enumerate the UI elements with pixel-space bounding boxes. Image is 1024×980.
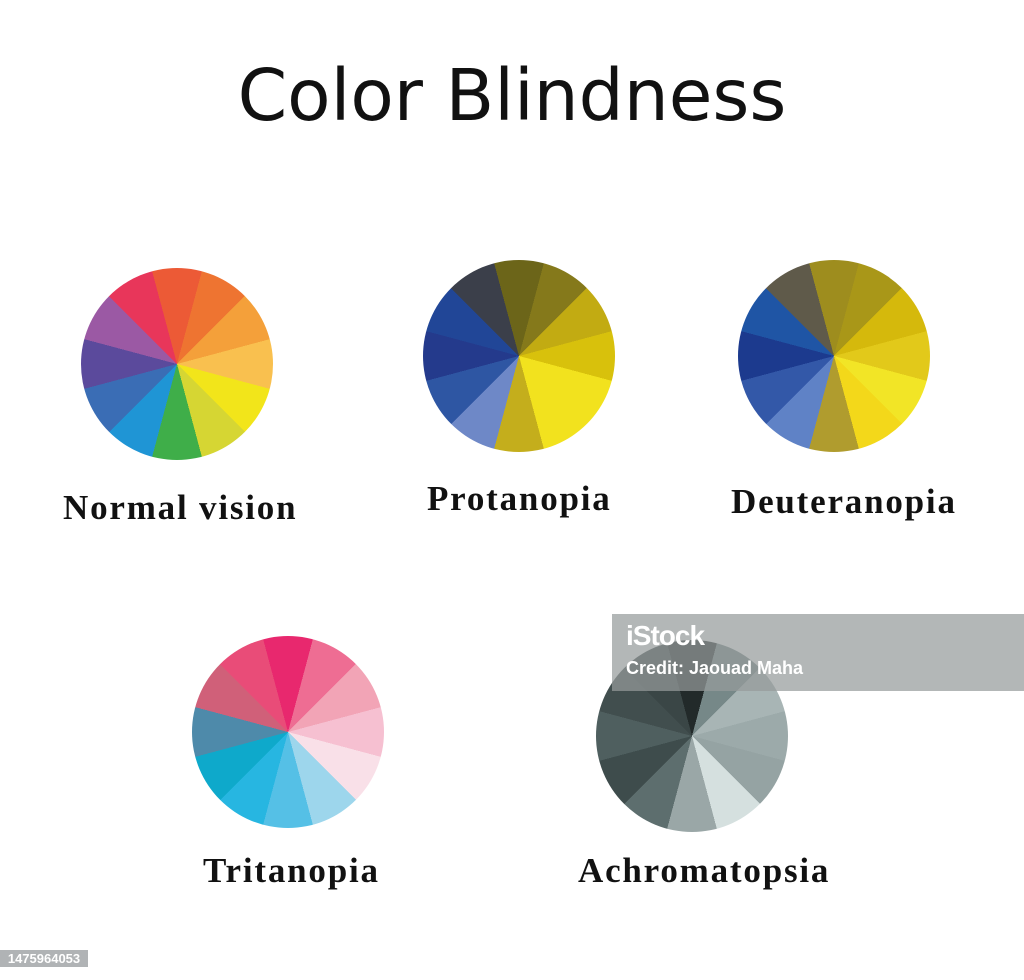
image id: 1475964053 [8, 951, 80, 966]
wheel: achromatopsia [596, 640, 788, 832]
wheel: protanopia [423, 260, 615, 452]
wheel: deuteranopia [738, 260, 930, 452]
label: tritanopia: Tritanopia [203, 851, 380, 890]
label: normal vision: Normal vision [63, 488, 297, 527]
wheel: normal vision [81, 268, 273, 460]
watermark credit: Credit: Jaouad Maha [626, 658, 803, 678]
label: protanopia: Protanopia [427, 479, 612, 518]
wheel: tritanopia [192, 636, 384, 828]
watermark banner [612, 614, 1024, 691]
label: achromatopsia: Achromatopsia [578, 851, 830, 890]
label: deuteranopia: Deuteranopia [731, 482, 957, 521]
title: Color Blindness [238, 54, 786, 137]
watermark logo: iStock [626, 620, 704, 651]
